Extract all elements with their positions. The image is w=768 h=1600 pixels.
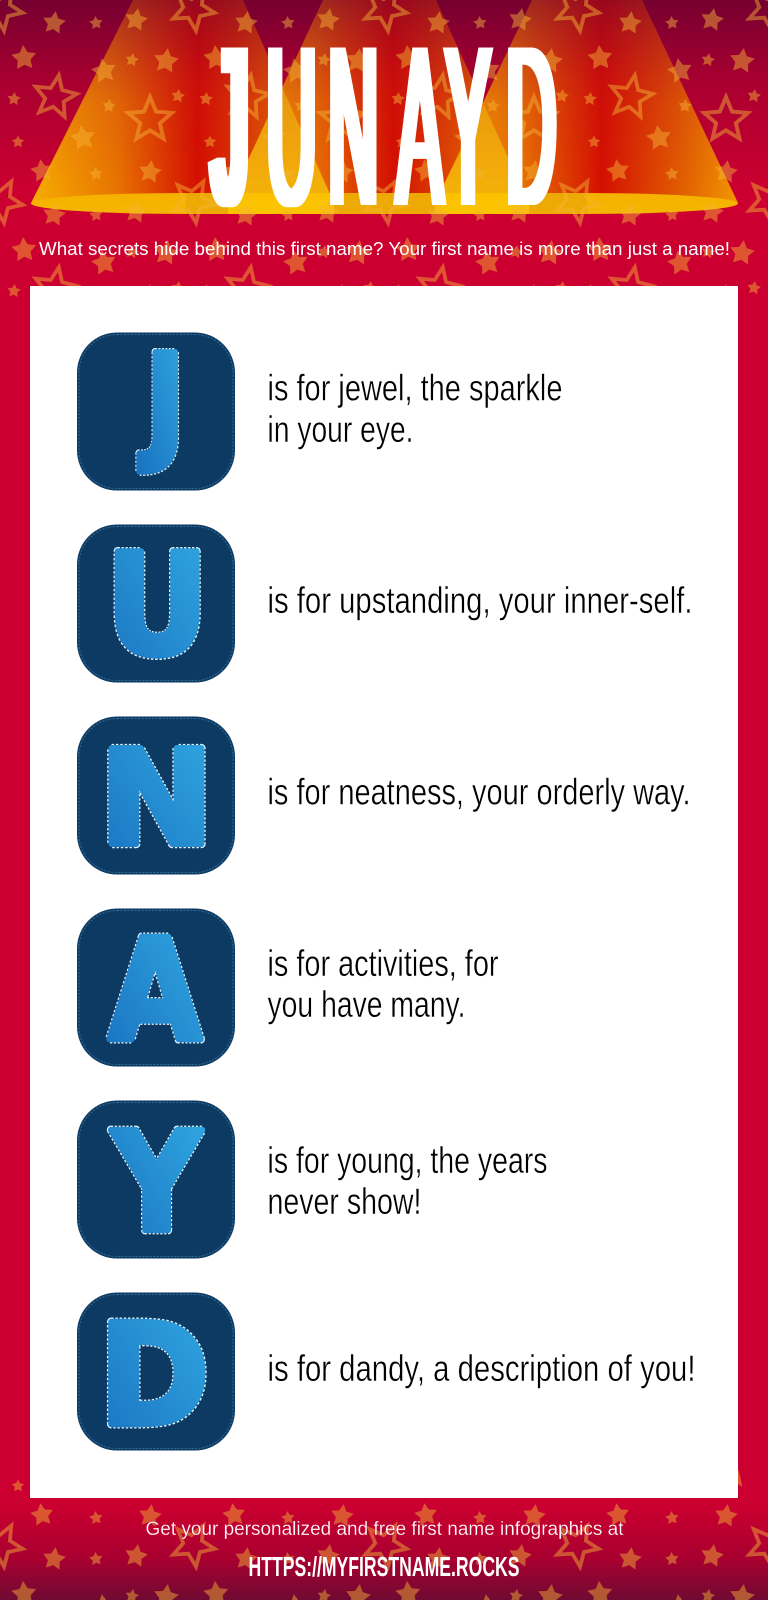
icon: N: N bbox=[99, 722, 214, 875]
footer line: Get your personalized and free first name infographics at bbox=[146, 1519, 624, 1540]
icon: U bbox=[77, 524, 235, 687]
icon: A: A bbox=[108, 909, 202, 1072]
icon: D: D bbox=[99, 1295, 209, 1458]
icon: Y bbox=[77, 1100, 235, 1263]
text A: you have many. bbox=[268, 984, 466, 1025]
text Y: never show! bbox=[268, 1181, 422, 1222]
text J: in your eye. bbox=[268, 409, 414, 450]
icon: J: J bbox=[139, 327, 186, 477]
row A bbox=[77, 908, 498, 1072]
row Y bbox=[77, 1100, 548, 1263]
text J: is for jewel, the sparkle bbox=[268, 368, 562, 408]
text Y: is for young, the years bbox=[268, 1140, 548, 1181]
icon: A: A bbox=[108, 909, 202, 1072]
panel: letters bbox=[30, 286, 738, 1498]
icon: A bbox=[77, 908, 235, 1072]
icon: J: J bbox=[139, 327, 186, 477]
text A: is for activities, for bbox=[268, 943, 498, 984]
footer url: HTTPS://MYFIRSTNAME.ROCKS bbox=[248, 1551, 520, 1582]
icon: Y: Y bbox=[110, 1103, 203, 1263]
title: J bbox=[211, 0, 249, 254]
row U bbox=[77, 524, 692, 687]
row N bbox=[77, 716, 690, 875]
title: UNAYD bbox=[267, 0, 556, 254]
icon: N: N bbox=[99, 722, 214, 875]
icon: U: U bbox=[106, 524, 208, 687]
star pattern top bbox=[0, 0, 768, 302]
icon: J bbox=[77, 327, 235, 490]
row J bbox=[77, 327, 562, 490]
icon: D bbox=[77, 1292, 235, 1458]
star pattern bottom bbox=[0, 1470, 768, 1600]
row D bbox=[77, 1292, 696, 1458]
icon: U: U bbox=[106, 524, 208, 687]
icon: D: D bbox=[99, 1295, 209, 1458]
subtitle: What secrets hide behind this first name? Your first name is more than just a name! bbox=[39, 239, 730, 259]
icon: Y: Y bbox=[110, 1103, 203, 1263]
spotlights bbox=[31, 0, 738, 214]
